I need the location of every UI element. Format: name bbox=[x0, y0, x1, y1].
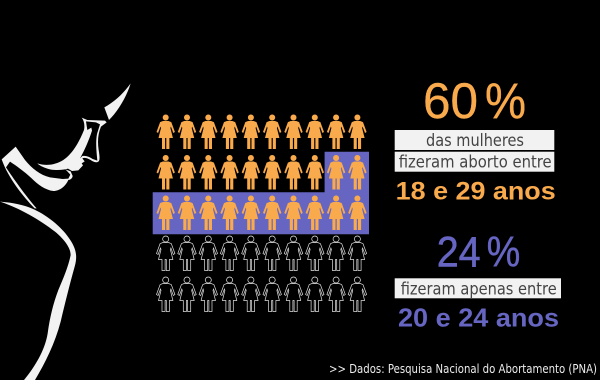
label box: fizeram apenas entre: fizeram apenas entre bbox=[401, 279, 557, 299]
illustration: woman silhouette in profile bbox=[0, 83, 131, 380]
age range: 20 e 24 anos: 20 e 24 anos bbox=[398, 303, 559, 333]
pictogram: 20 outlined women bbox=[156, 236, 367, 312]
statistic: 60%: % bbox=[485, 73, 526, 129]
highlight: purple block for 24% bbox=[153, 152, 369, 234]
label box: das mulheres: das mulheres bbox=[426, 131, 524, 151]
label box: fizeram aborto entre: fizeram aborto entre bbox=[399, 152, 552, 172]
hair strand bbox=[104, 83, 131, 120]
pictogram: 30 orange women bbox=[156, 114, 367, 230]
statistic: 60%: 60 bbox=[423, 73, 478, 129]
neck and shoulder bbox=[0, 202, 76, 380]
statistic: 24%: % bbox=[487, 229, 520, 277]
label box: das mulheres bbox=[395, 130, 554, 151]
jaw and lips bbox=[2, 147, 73, 208]
age range: 18 e 29 anos: 18 e 29 anos bbox=[396, 177, 556, 205]
nose and cheek bbox=[37, 118, 107, 171]
statistic: 24%: 24 bbox=[437, 229, 481, 277]
